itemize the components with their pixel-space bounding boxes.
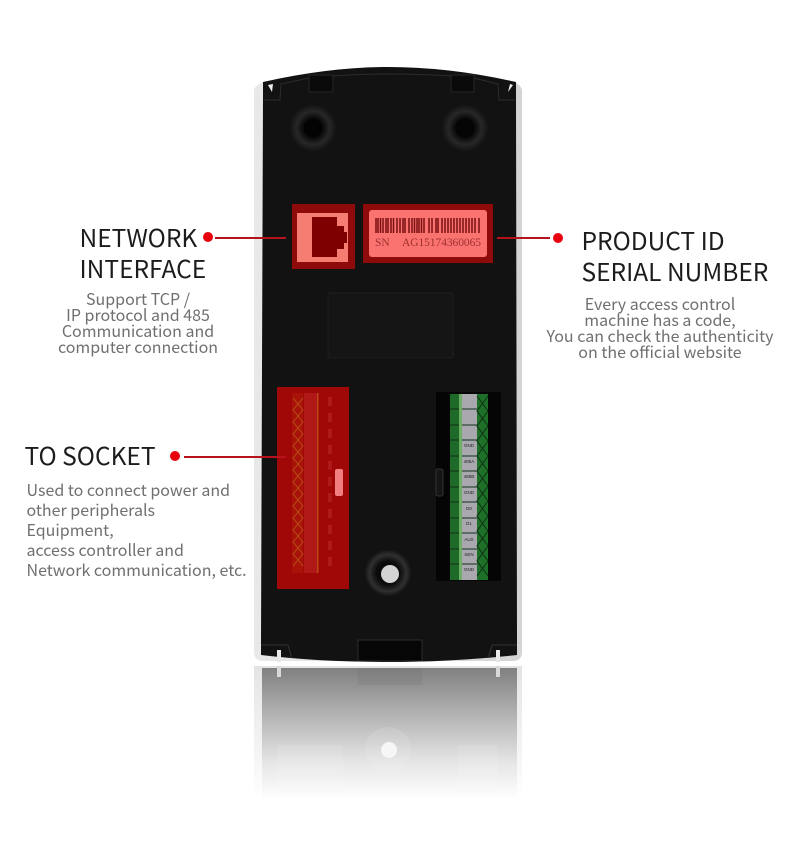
- text: product id description: on the official website: [578, 338, 742, 362]
- heading: product id: SERIAL NUMBER: [582, 254, 768, 289]
- connector line: network: [203, 232, 286, 242]
- text: socket description: access controller and: [26, 537, 184, 561]
- exposed terminal block: GND: [464, 567, 475, 572]
- exposed terminal block: SEN: [464, 552, 474, 557]
- exposed terminal block: D0: [466, 506, 472, 511]
- text: socket description: Equipment,: [26, 517, 114, 541]
- exposed terminal block: D1: [466, 521, 472, 526]
- highlighted network port: [292, 204, 355, 269]
- recessed label area: [328, 293, 453, 358]
- text: network description: IP protocol and 485: [66, 302, 210, 326]
- connector line: product id: [497, 233, 563, 243]
- device black back plate: [261, 67, 517, 662]
- exposed terminal block: GND: [464, 443, 475, 448]
- text: socket description: Network communication, etc.: [26, 557, 247, 581]
- serial number text: SN: [375, 237, 390, 249]
- serial number value: AG15174360065: [402, 237, 481, 249]
- exposed terminal block: AUX: [464, 537, 474, 542]
- screw hole bottom: [365, 550, 411, 596]
- text: socket description: [26, 477, 247, 581]
- exposed terminal block: GND: [464, 490, 475, 495]
- heading: network interface: NETWORK: [80, 220, 197, 255]
- highlighted serial number label: [363, 204, 493, 263]
- exposed terminal block: 485A: [464, 459, 474, 464]
- text: network description: [58, 286, 218, 358]
- text: socket description: Used to connect power and: [26, 477, 230, 501]
- text: product id description: You can check the authenticity: [546, 322, 774, 346]
- text: network description: Support TCP /: [86, 286, 190, 310]
- text: product id description: Every access control: [585, 290, 735, 314]
- device reflection: [254, 666, 522, 800]
- text: product id description: machine has a code,: [584, 306, 736, 330]
- text: product id description: [546, 290, 774, 362]
- heading: product id: [582, 223, 768, 289]
- heading: network interface: [80, 220, 206, 286]
- text: network description: Communication and: [62, 318, 214, 342]
- barcode: [376, 218, 479, 233]
- screw hole top right: [442, 105, 488, 151]
- heading: network interface: INTERFACE: [80, 251, 206, 286]
- device silver frame: [254, 82, 522, 661]
- text: network description: computer connection: [58, 334, 218, 358]
- exposed terminal block: 485B: [464, 474, 474, 479]
- text: socket description: other peripherals: [26, 497, 155, 521]
- heading: to socket: TO SOCKET: [24, 438, 156, 473]
- screw hole top left: [290, 105, 336, 151]
- heading: product id: PRODUCT ID: [582, 223, 725, 258]
- highlighted socket terminal block: [277, 387, 349, 589]
- exposed terminal block: [436, 392, 501, 581]
- connector line: socket: [170, 451, 286, 461]
